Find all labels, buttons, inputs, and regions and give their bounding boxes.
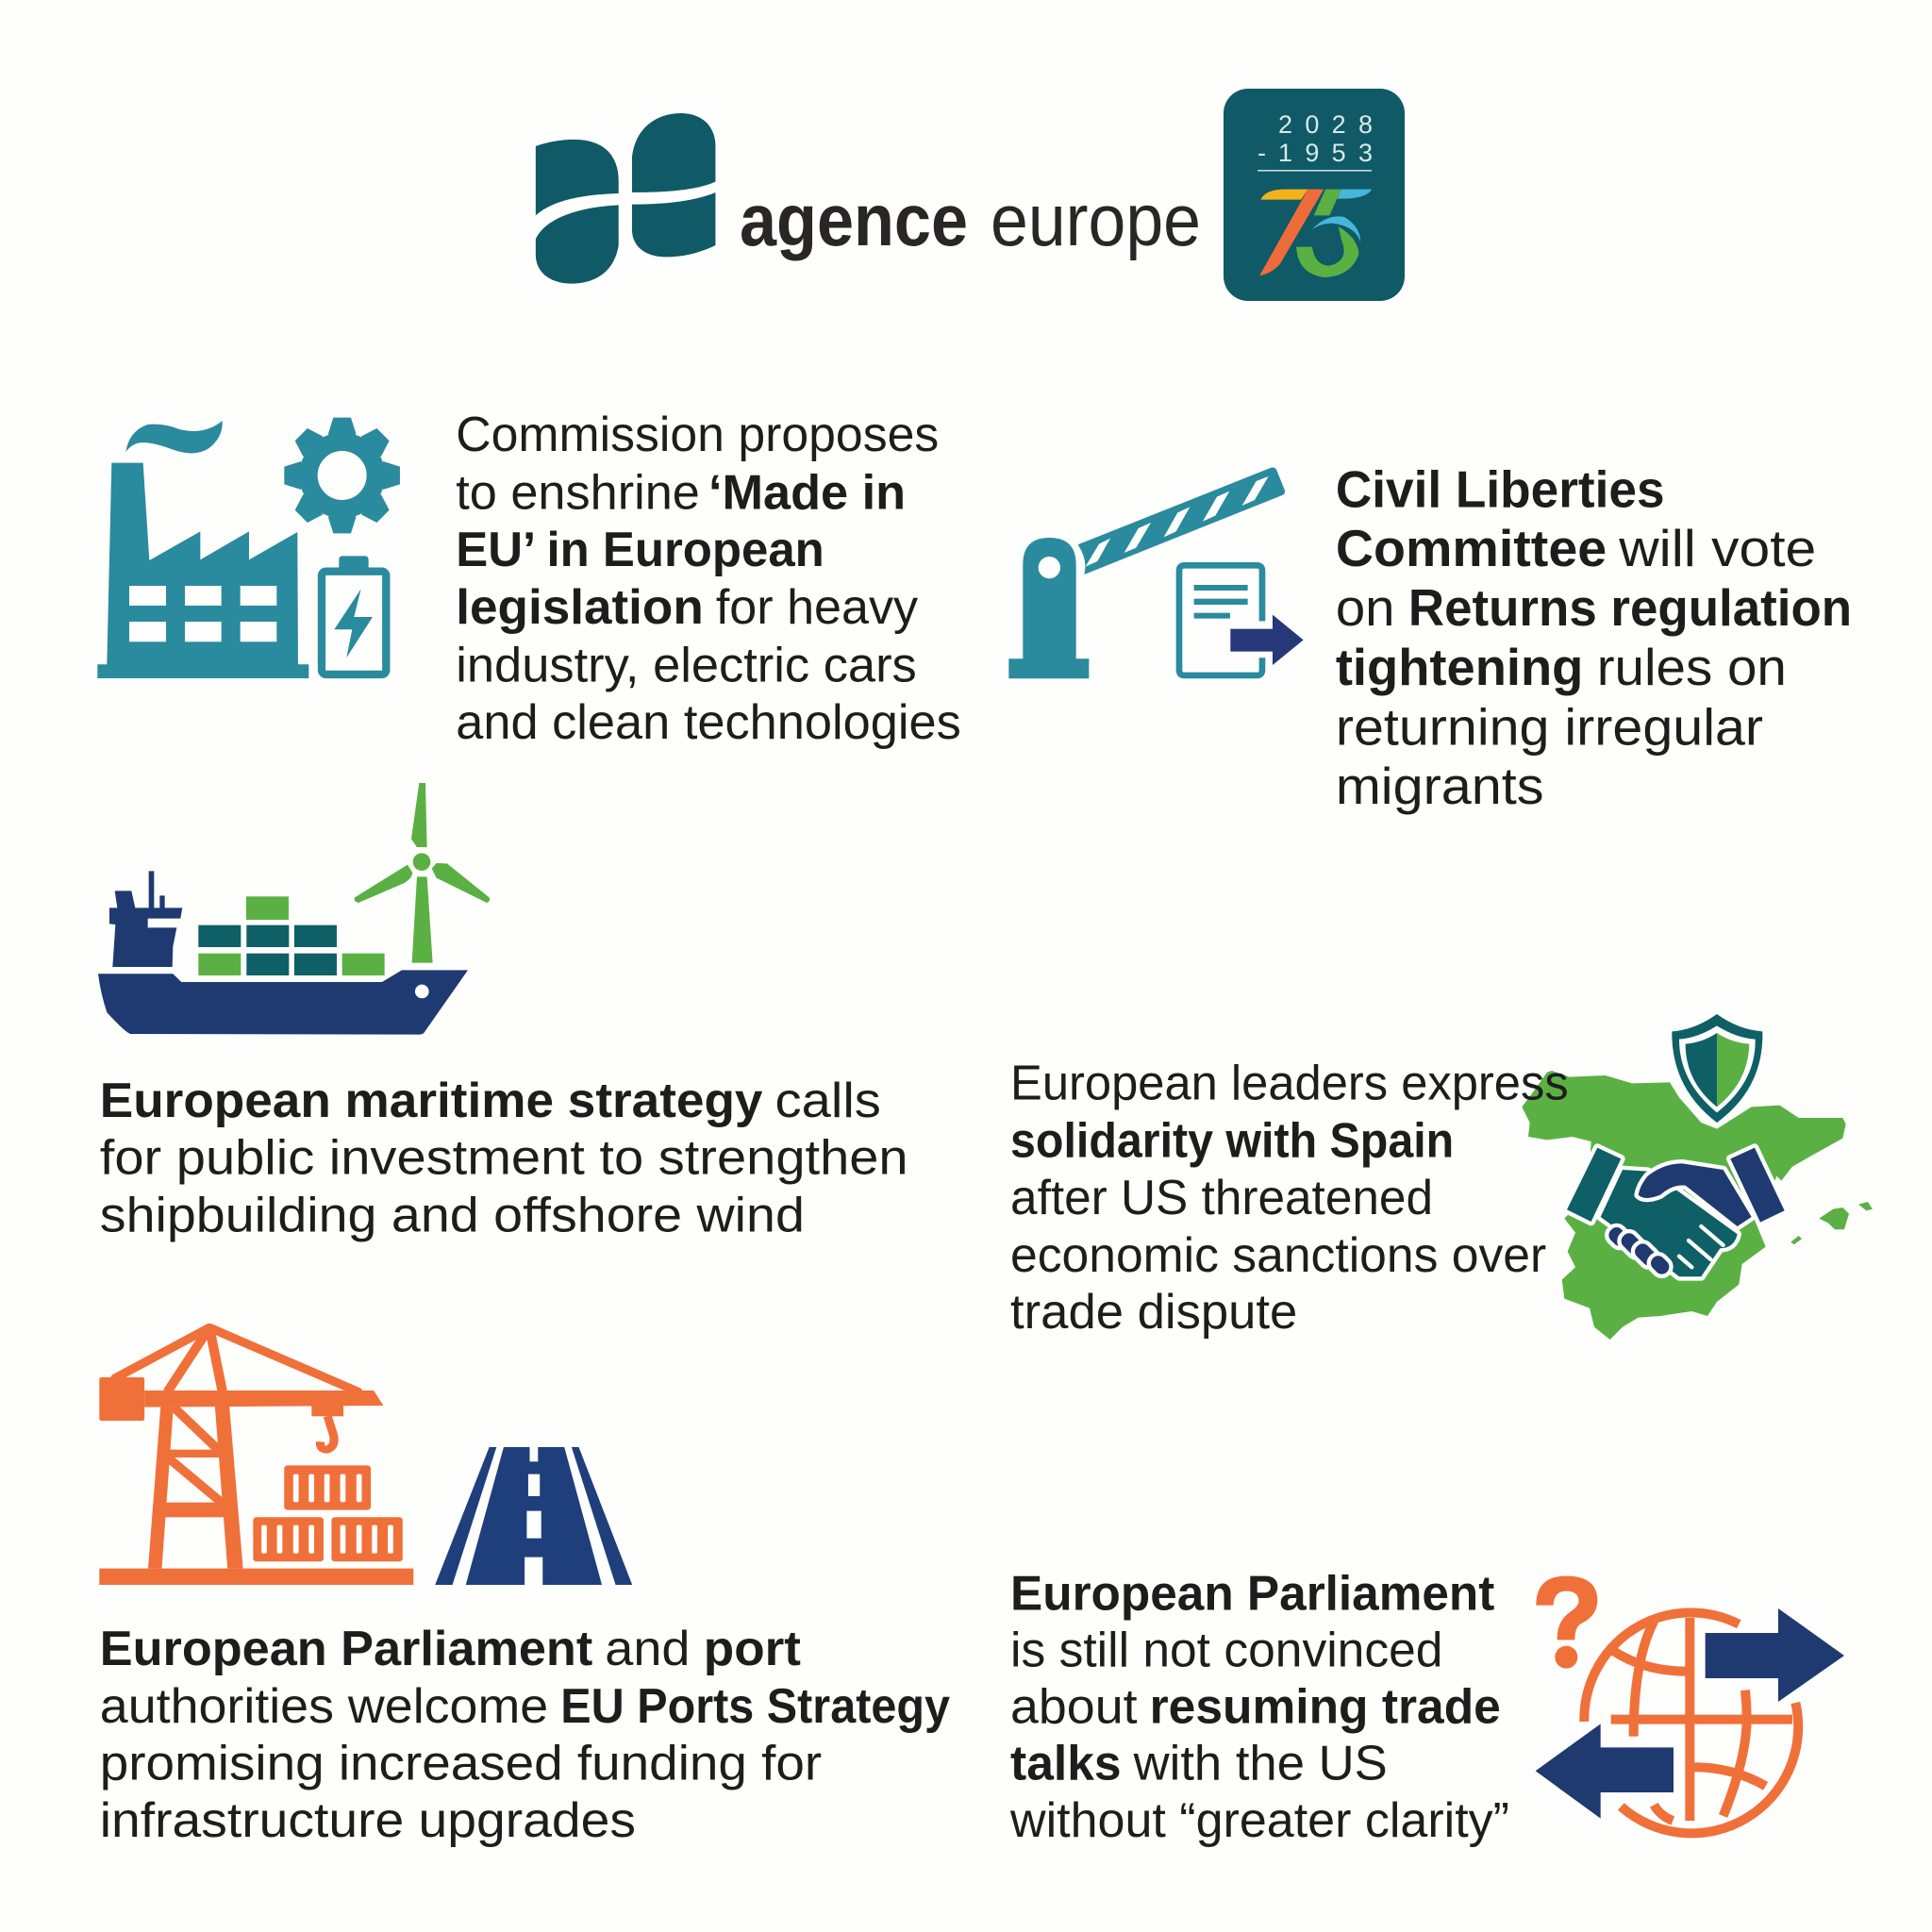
text: Made in EU: industry, electric cars [456,638,917,692]
text: solidarity with Spain: after US threatened [1010,1171,1433,1225]
text: resuming trade talks: with the US [1133,1737,1388,1791]
text: Civil Liberties Committee: Civil Liberties [1336,459,1665,518]
text: Civil Liberties Committee: on [1336,578,1395,637]
text: solidarity with Spain: solidarity with Spain [1010,1113,1454,1168]
anniversary badge: - [1257,139,1266,167]
text: resuming trade talks: about [1010,1680,1138,1735]
icon: factory, gear and battery [97,418,400,678]
text: Made in EU: to enshrine [456,465,700,520]
icon: container ship and wind turbine [98,783,490,1035]
text: EU Ports Strategy: EU Ports Strategy [560,1679,950,1734]
text: resuming trade talks: without “greater clarity” [1009,1793,1509,1848]
text: resuming trade talks: European Parliament [1010,1566,1494,1621]
text: Made in EU: legislation [456,580,704,635]
text: Civil Liberties Committee: will vote [1618,519,1816,577]
icon: Spain map, shield and handshake [1522,1014,1873,1340]
text: EU Ports Strategy: port [704,1622,801,1676]
text: resuming trade talks: talks [1010,1737,1122,1791]
text: EU Ports Strategy: and [605,1622,690,1676]
text: Civil Liberties Committee: tightening [1336,638,1583,696]
logo wordmark: europe [991,178,1201,261]
anniversary badge [1224,89,1405,301]
text: Made in EU: EU’ in European [456,523,824,577]
text: resuming trade talks [1009,1566,1509,1848]
text: maritime strategy [100,1074,908,1242]
text: EU Ports Strategy [100,1622,950,1848]
text: Civil Liberties Committee: migrants [1336,757,1544,815]
text: maritime strategy: European maritime strategy [100,1074,762,1128]
text: solidarity with Spain: economic sanctions over [1010,1228,1546,1283]
text: EU Ports Strategy: infrastructure upgrades [100,1793,636,1848]
text: Civil Liberties Committee: Committee [1336,519,1607,577]
icon: question mark, globe and trade arrows [1536,1576,1844,1833]
text: EU Ports Strategy: authorities welcome [100,1679,548,1734]
text: Civil Liberties Committee: returning irregular [1336,698,1763,757]
text: Made in EU: ‘Made in [708,465,906,520]
icon: road [435,1447,632,1585]
text: Civil Liberties Committee [1336,459,1852,815]
icon: barrier and document with arrow [1008,468,1304,678]
logo: agence europe symbol [536,113,715,284]
text: resuming trade talks: resuming trade [1150,1680,1501,1735]
text: maritime strategy: shipbuilding and offshore wind [100,1188,805,1242]
text: solidarity with Spain: trade dispute [1010,1285,1297,1340]
icon: port crane and containers [99,1327,413,1585]
text: resuming trade talks: is still not convinced [1010,1624,1442,1678]
logo wordmark: agence [740,178,968,261]
text: EU Ports Strategy: European Parliament [100,1622,592,1676]
text: Made in EU: and clean technologies [456,695,961,750]
text: maritime strategy: calls [775,1074,881,1128]
text: Made in EU [456,408,961,750]
text: EU Ports Strategy: promising increased funding for [100,1737,822,1791]
text: Civil Liberties Committee: Returns regulation [1408,578,1852,637]
text: Civil Liberties Committee: rules on [1597,638,1787,696]
text: solidarity with Spain: European leaders express [1010,1057,1569,1111]
text: Made in EU: Commission proposes [456,408,939,462]
anniversary badge: 2028 [1278,110,1373,139]
text: maritime strategy: for public investment to strengthen [100,1131,908,1186]
text: solidarity with Spain [1010,1057,1569,1340]
anniversary badge: 1953 [1278,139,1373,167]
text: Made in EU: for heavy [716,580,919,635]
logo wordmark [740,178,1201,261]
